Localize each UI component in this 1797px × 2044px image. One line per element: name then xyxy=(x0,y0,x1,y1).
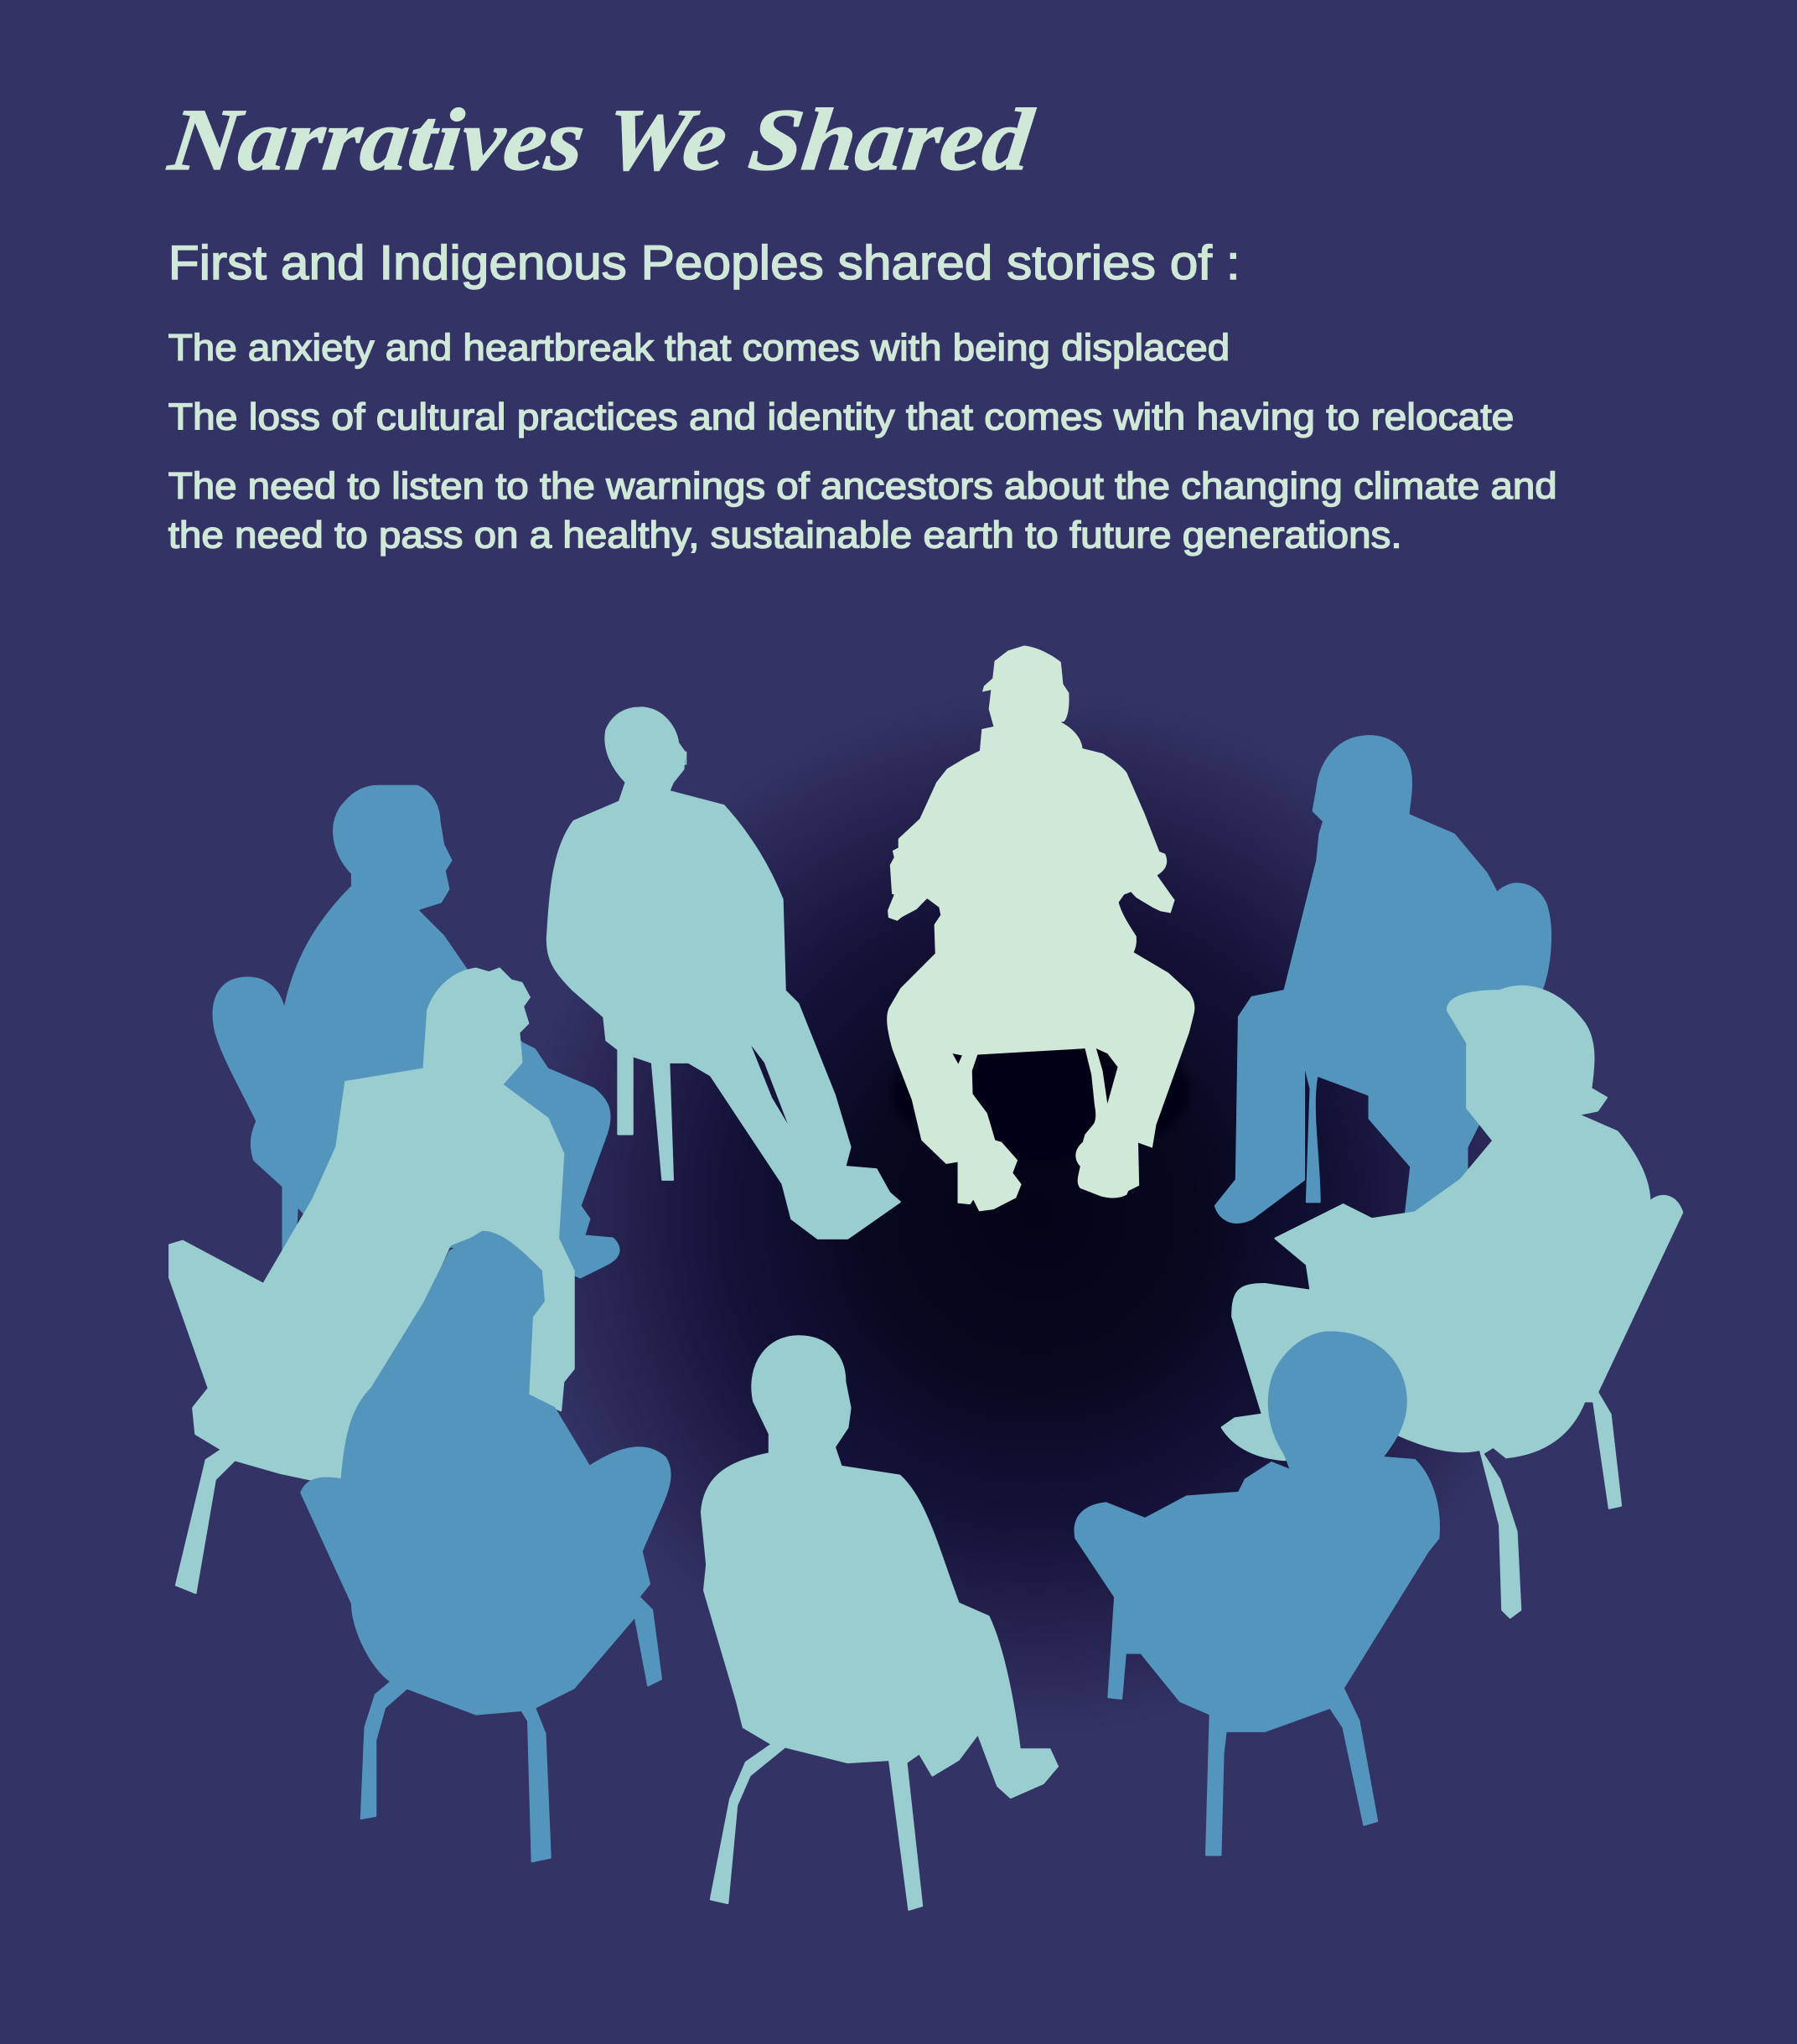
story: ancestors' warnings: the need to pass on a healthy, sustainable earth to future generations. xyxy=(168,515,1402,556)
shadow under central figure xyxy=(892,1025,1189,1160)
heading: First and Indigenous Peoples shared stories of : xyxy=(168,236,1240,290)
text block: shared stories xyxy=(168,328,1557,556)
dark radial glow at circle centre xyxy=(515,691,1558,1734)
story: cultural loss: The loss of cultural practices and identity that comes with having to relocate xyxy=(168,397,1514,438)
figure: lower-right blue person xyxy=(1075,1332,1439,1855)
story: ancestors' warnings xyxy=(168,466,1557,556)
figure: top-left blue seated person xyxy=(214,786,619,1277)
figure: left light seated person xyxy=(169,969,574,1593)
figure: lower-left blue seated person xyxy=(301,1232,670,1861)
story: displacement: The anxiety and heartbreak that comes with being displaced xyxy=(168,328,1230,369)
figure: bottom-centre light person xyxy=(702,1336,1058,1910)
figure: upper-left light person with glasses xyxy=(547,708,900,1239)
figure: upper-right blue person xyxy=(1215,736,1551,1223)
figure: central speaker xyxy=(887,645,1194,1211)
title: Narratives We Shared xyxy=(163,91,1039,189)
figure: right light person with cap xyxy=(1222,986,1682,1617)
story: ancestors' warnings: The need to listen to the warnings of ancestors about the changing climate and xyxy=(168,466,1557,507)
